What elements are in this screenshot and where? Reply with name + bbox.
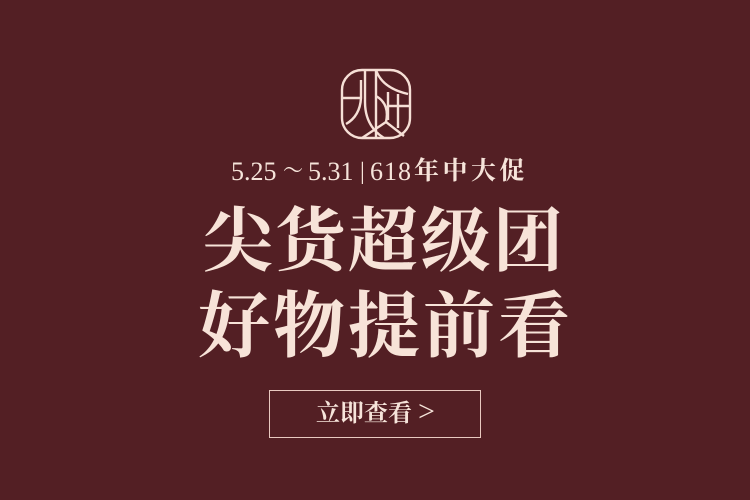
main heading line 1: 尖货超级团: [203, 204, 566, 281]
date subtitle: 5.25: [231, 157, 276, 186]
date subtitle: 5.31: [308, 157, 354, 186]
button label: 立即查看>: [316, 395, 435, 428]
logo icon: [340, 68, 412, 140]
date subtitle: ～: [283, 158, 303, 185]
date subtitle: |: [360, 159, 365, 185]
date subtitle: 年中大促: [414, 158, 528, 185]
main heading line 2: 好物提前看: [198, 287, 573, 367]
button: [269, 390, 481, 438]
date subtitle: 618: [370, 157, 412, 186]
date subtitle: [231, 157, 528, 186]
